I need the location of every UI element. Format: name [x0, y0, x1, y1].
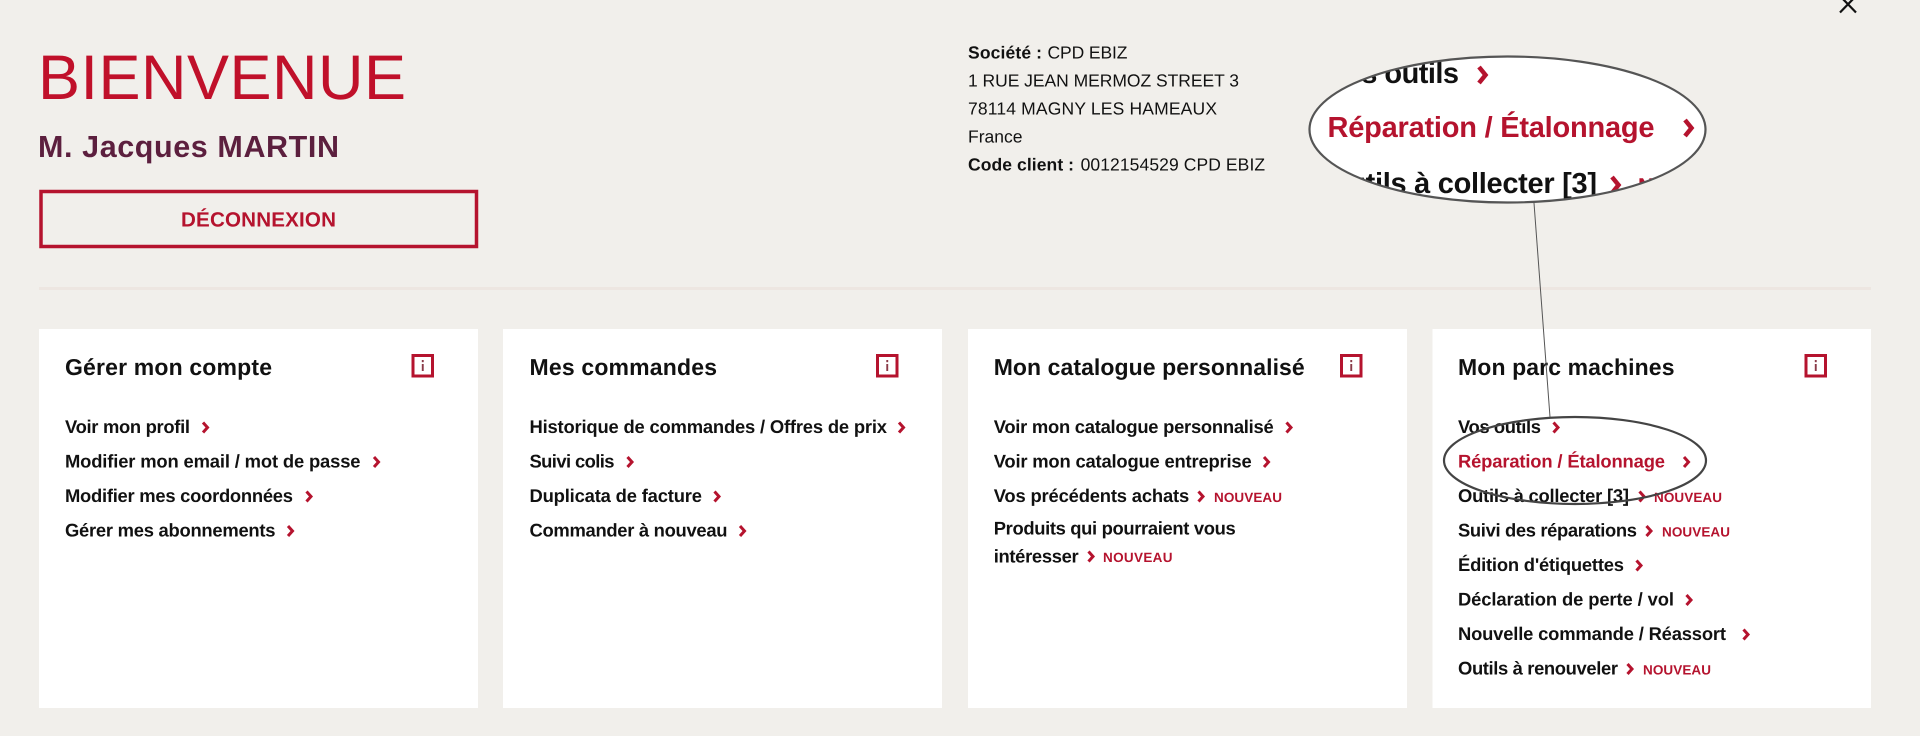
- callout: magnifier lens: Réparation / Étalonnage: [1328, 111, 1654, 144]
- link: commander à nouveau: Commander à nouveau: [530, 520, 728, 540]
- title: Bienvenue: BIENVENUE: [38, 43, 406, 113]
- arrow: connector line: [1534, 203, 1550, 417]
- callout: magnifier lens: Vos outils: [1328, 58, 1459, 90]
- text block: company details: Code client :: [968, 154, 1074, 174]
- link: modifier email: Modifier mon email / mot de passe: [65, 450, 360, 472]
- link: outils à collecter: NOUVEAU: [1654, 490, 1722, 505]
- link: abonnements: Gérer mes abonnements: [65, 520, 276, 540]
- link: précédents achats: NOUVEAU: [1214, 490, 1282, 505]
- text block: company details: 78114 MAGNY LES HAMEAUX: [968, 98, 1217, 118]
- link: suivi des réparations: Suivi des réparations: [1458, 520, 1637, 540]
- link: produits suggérés: [994, 518, 1236, 566]
- heading: Mon parc machines: [1458, 354, 1674, 380]
- link: suivi des réparations: NOUVEAU: [1662, 524, 1730, 540]
- link: suivi des réparations: [1458, 520, 1730, 540]
- link: suivi colis: Suivi colis: [530, 450, 614, 472]
- panel: mes commandes: [503, 329, 942, 708]
- icon: info: [878, 356, 897, 376]
- heading: Gérer mon compte: [65, 354, 272, 380]
- text block: company details: 1 RUE JEAN MERMOZ STREET 3: [968, 70, 1239, 90]
- link: produits suggérés: NOUVEAU: [1103, 550, 1172, 565]
- link: historique: Historique de commandes / Offres de prix: [530, 416, 888, 437]
- callout: magnifier lens: [1310, 56, 1745, 202]
- heading: Mes commandes: [530, 354, 717, 380]
- link: nouvelle commande: Nouvelle commande / Réassort: [1458, 623, 1726, 644]
- panel: mon catalogue personnalisé: [968, 329, 1407, 708]
- link: précédents achats: [994, 485, 1282, 506]
- button: déconnexion: DÉCONNEXION: [181, 208, 336, 232]
- link: déclaration de perte: Déclaration de perte / vol: [1458, 588, 1674, 610]
- link: outils à renouveler: NOUVEAU: [1643, 662, 1711, 678]
- icon: close: [1840, 0, 1856, 12]
- link: voir mon profil: Voir mon profil: [65, 416, 190, 437]
- text block: company details: Société :: [968, 42, 1042, 62]
- callout: magnifier lens: NOUVEAU: [1638, 174, 1745, 198]
- link: vos outils: Vos outils: [1458, 416, 1541, 437]
- link: outils à renouveler: Outils à renouveler: [1458, 658, 1618, 678]
- icon: info: [1806, 356, 1826, 376]
- button: déconnexion: [41, 192, 476, 246]
- link: édition d'étiquettes: Édition d'étiquettes: [1458, 554, 1624, 575]
- link: réparation étalonnage: Réparation / Étalonnage: [1458, 450, 1665, 472]
- link: catalogue entreprise: Voir mon catalogue entreprise: [994, 450, 1252, 472]
- link: duplicata: Duplicata de facture: [530, 485, 702, 506]
- user name: M. Jacques MARTIN: [38, 130, 339, 164]
- link: précédents achats: Vos précédents achats: [994, 485, 1189, 506]
- link: outils à renouveler: [1458, 658, 1711, 678]
- link: modifier coordonnées: Modifier mes coordonnées: [65, 485, 293, 506]
- text block: company details: France: [968, 126, 1022, 146]
- callout: highlight ellipse: [1444, 417, 1706, 504]
- text block: company details: 0012154529 CPD EBIZ: [1081, 154, 1265, 174]
- link: outils à collecter: [1458, 485, 1722, 506]
- icon: info: [1342, 356, 1361, 376]
- icon: info: [413, 356, 432, 376]
- link: catalogue personnalisé: Voir mon catalogue personnalisé: [994, 416, 1274, 437]
- text block: company details: CPD EBIZ: [1048, 42, 1128, 62]
- heading: Mon catalogue personnalisé: [994, 354, 1305, 380]
- link: produits suggérés: Produits qui pourraient vous: [994, 518, 1236, 538]
- panel: mon parc machines: [1432, 329, 1871, 708]
- text block: company details: [968, 42, 1265, 174]
- callout: magnifier lens: Outils à collecter [3]: [1326, 168, 1597, 200]
- panel: gérer mon compte: [39, 329, 478, 708]
- link: produits suggérés: intéresser: [994, 546, 1079, 566]
- link: outils à collecter: Outils à collecter [3]: [1458, 485, 1629, 506]
